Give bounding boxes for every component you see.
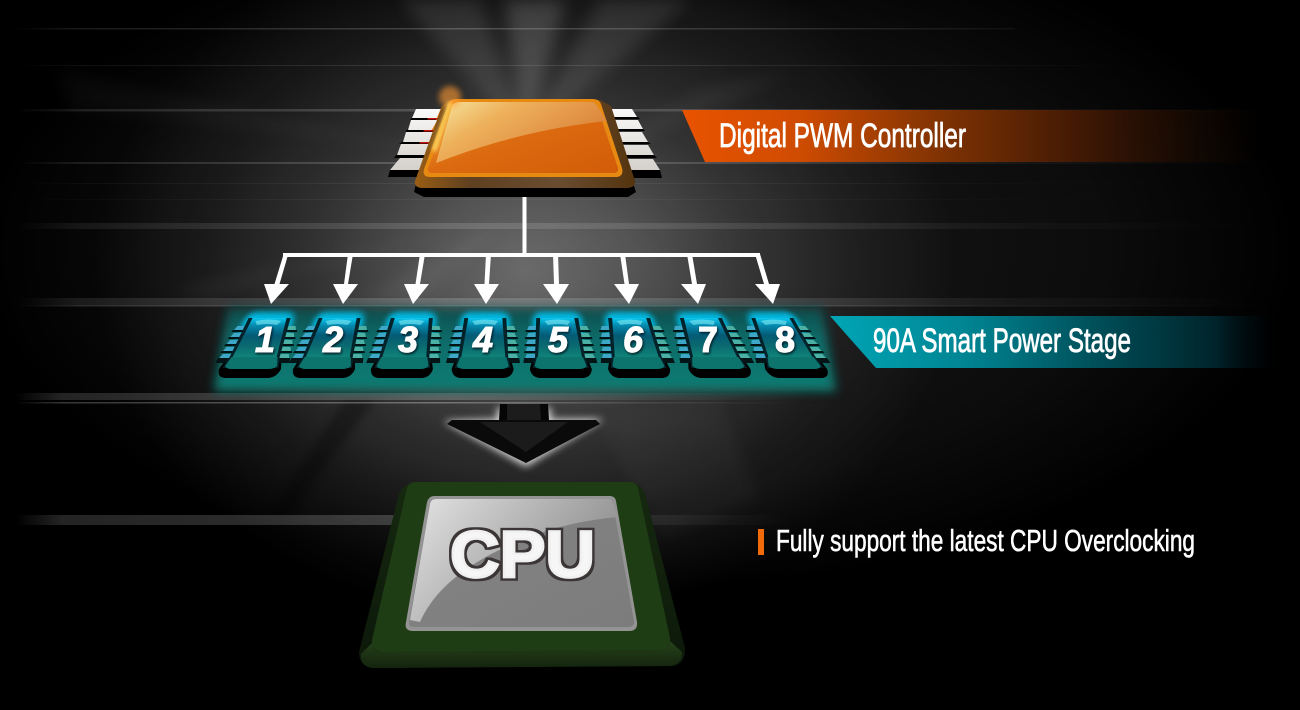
power stage glow xyxy=(214,308,836,391)
glow behind down arrow xyxy=(443,408,604,467)
chip shadow xyxy=(414,180,636,197)
connector arrows xyxy=(264,197,780,304)
chip 7: 7 xyxy=(698,319,718,360)
arrow 5 xyxy=(543,254,569,304)
arrow 2 xyxy=(333,254,358,304)
flare xyxy=(432,86,461,152)
chip 3 xyxy=(363,312,450,378)
cpu shadow xyxy=(358,660,686,682)
arrow 7 xyxy=(681,254,706,304)
chip 8 xyxy=(733,312,837,378)
chip 3: 3 xyxy=(398,319,418,360)
arrow 1 xyxy=(264,253,289,304)
trunk xyxy=(522,197,526,257)
chip 5: 5 xyxy=(548,319,569,360)
panel: CPU xyxy=(358,482,686,682)
chip 5 xyxy=(520,312,598,378)
chip 1 xyxy=(210,312,309,378)
chip 7 xyxy=(662,312,760,378)
chip 8: 8 xyxy=(775,319,795,360)
cpu lip xyxy=(361,641,682,668)
chip base xyxy=(415,100,635,188)
banner: Digital PWM Controller xyxy=(682,110,1265,162)
chip gloss xyxy=(436,102,607,163)
chip 6 xyxy=(591,312,678,378)
banner: 90A Smart Power Stage xyxy=(830,316,1285,368)
arrow 6 xyxy=(614,254,639,304)
heat spreader gloss xyxy=(410,499,618,622)
chip 4 xyxy=(445,312,523,378)
arrow 8 xyxy=(755,254,780,304)
chip 2: 2 xyxy=(322,319,343,360)
right pins xyxy=(608,109,662,178)
down arrow xyxy=(447,404,600,463)
chip 4: 4 xyxy=(472,319,493,360)
bus xyxy=(283,253,760,257)
power stage chips xyxy=(210,312,837,378)
left pins xyxy=(388,104,449,177)
banner: Digital PWM Controller: Digital PWM Controller xyxy=(719,117,966,155)
banner: 90A Smart Power Stage: 90A Smart Power Stage xyxy=(873,322,1131,360)
cpu substrate xyxy=(372,482,670,652)
chip 1: 1 xyxy=(255,319,275,360)
arrow 4 xyxy=(474,254,499,304)
heat spreader face xyxy=(409,499,634,627)
arrow 3 xyxy=(404,254,429,304)
chip 6: 6 xyxy=(623,319,644,360)
panel: controller chip xyxy=(388,86,662,197)
chip rim xyxy=(424,99,622,177)
chip face xyxy=(428,102,618,173)
heat spreader xyxy=(406,496,637,631)
cpu label: CPU xyxy=(450,517,595,591)
cpu package xyxy=(359,483,685,668)
chip 2 xyxy=(284,312,378,378)
